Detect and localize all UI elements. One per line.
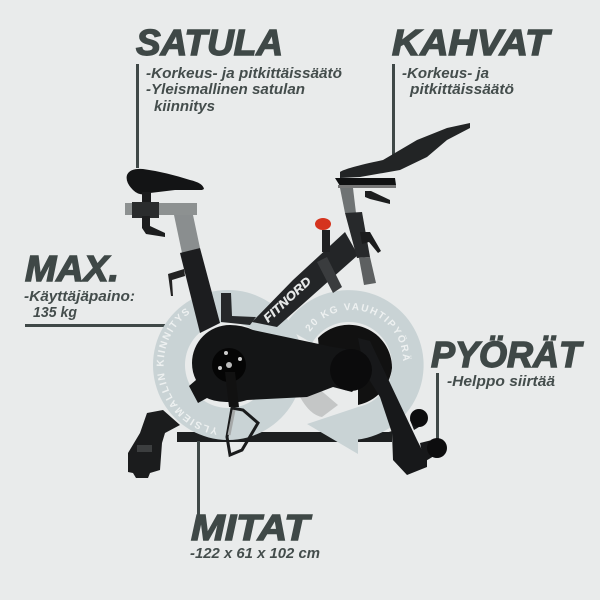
heading: kahvat: KAHVAT [392, 22, 552, 63]
seat tube [180, 248, 220, 333]
heading: max: MAX. [25, 248, 119, 289]
text: satula features: -Korkeus- ja pitkittäissäätö [146, 65, 342, 82]
seat knob [168, 269, 185, 296]
saddle [127, 169, 204, 194]
text: satula features: kiinnitys [154, 98, 215, 115]
text: wheels: -Helppo siirtää [447, 373, 555, 390]
text: kahvat features [402, 65, 514, 98]
text: max user weight [24, 288, 135, 321]
ring label: flywheel: 20 KG VAUHTIPYÖRÄ [306, 303, 412, 361]
floor bar [177, 432, 392, 442]
text: kahvat features: pitkittäissäätö [409, 81, 514, 98]
exercise bike [125, 123, 470, 478]
handlebar knob [360, 232, 381, 253]
ring label: universal mount: YLSIEMALLIN KIINNITYS [156, 308, 216, 435]
leader line: satula [136, 64, 139, 168]
brake knob [315, 218, 331, 252]
seat post [174, 215, 200, 253]
text: satula features [146, 65, 342, 115]
handlebars [340, 123, 470, 178]
crank arm [225, 372, 239, 407]
heading: mitat: MITAT [191, 507, 312, 548]
text: max user weight: -Käyttäjäpaino: [24, 288, 135, 305]
handlebar post [340, 188, 356, 213]
frame collar [317, 257, 342, 293]
callout: pyorat [431, 334, 584, 443]
chain guard [189, 325, 372, 403]
pedal [227, 408, 258, 455]
leader line: max [25, 324, 165, 327]
frame logo: FITNORD [260, 274, 314, 325]
ring: universal mount [153, 290, 298, 440]
floor bar lower wedge [358, 431, 392, 442]
leader line: mitat [197, 441, 200, 515]
crank hub [212, 348, 246, 382]
front leg and foot [358, 338, 427, 475]
transport wheels [410, 409, 447, 462]
bottle holder [221, 293, 256, 325]
text: max user weight: 135 kg [33, 304, 77, 321]
rear foot [128, 410, 180, 478]
ring arrow: flywheel rotation [288, 290, 424, 454]
callout: kahvat [392, 22, 552, 156]
heading: pyorat: PYÖRÄT [431, 334, 584, 375]
leader line: kahvat [392, 64, 395, 156]
handlebar head tube [345, 212, 370, 258]
text: kahvat features: -Korkeus- ja [402, 65, 489, 82]
main frame [252, 232, 358, 327]
leader line: pyorat [436, 373, 439, 443]
callout: satula [136, 22, 342, 168]
callout: mitat [190, 441, 320, 562]
text: satula features: -Yleismallinen satulan [146, 81, 305, 98]
heading: satula: SATULA [136, 22, 283, 63]
callout: max [24, 248, 165, 327]
flywheel disc [318, 325, 392, 405]
silver flywheel edge [300, 388, 338, 417]
text: dimensions: -122 x 61 x 102 cm [190, 545, 320, 562]
pulley [330, 349, 372, 391]
